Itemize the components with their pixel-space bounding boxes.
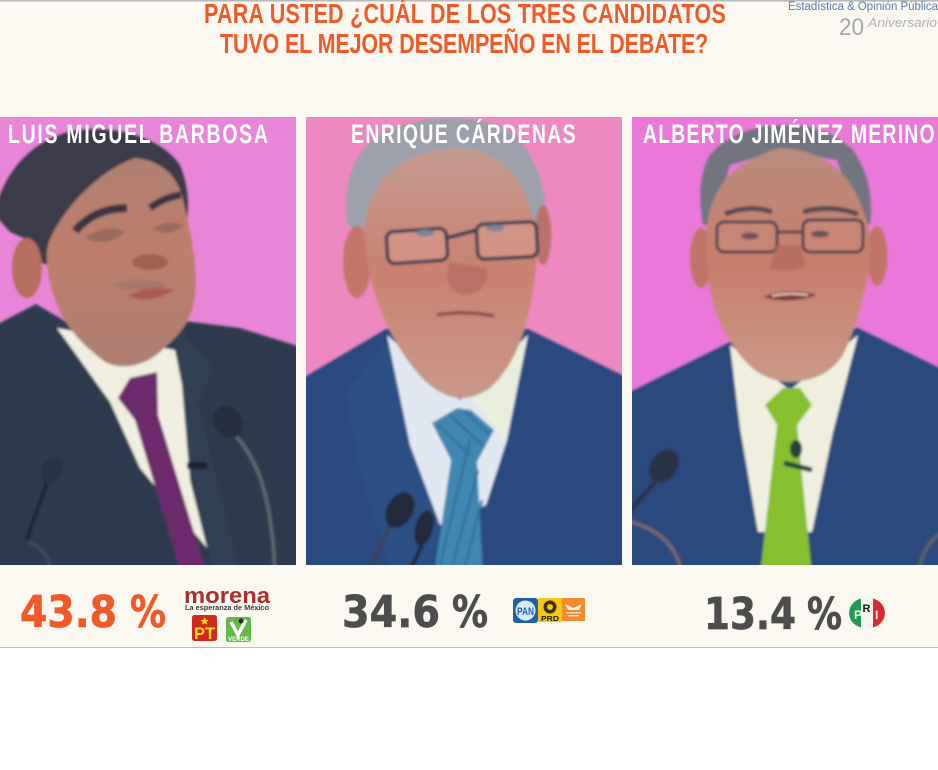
microphones [648,448,680,484]
logo: PRI [849,598,885,628]
result: Jiménez Merino 13.4%: % [807,589,842,640]
panel: Enrique Cárdenas photo [296,117,632,580]
result: Cárdenas 34.6%: % [452,587,488,638]
eyes [416,230,434,236]
microphones [232,432,275,575]
logo: PRI: P [854,608,862,622]
panel: Alberto Jiménez Merino photo [622,117,938,580]
logo: PT: PT [194,624,216,643]
logo: Verde: VERDE [228,636,250,643]
logo: morena: morena [184,583,271,608]
title: PARA USTED ¿CUÁL DE LOS TRES CANDIDATOS [204,0,726,30]
panel: Luis Miguel Barbosa photo [0,117,310,580]
result: Barbosa 43.8%: 43.8 [20,587,117,638]
name: Jiménez Merino: ALBERTO JIMÉNEZ MERINO [643,118,935,149]
nose and mouth [132,254,168,270]
title [204,0,726,60]
glasses [717,222,777,252]
suit [622,328,938,580]
logos: morena, PT, Verde [184,583,271,643]
logo: PRI: I [875,608,878,622]
eyes [85,228,125,242]
shirt [387,335,528,525]
hair [344,117,546,231]
face [47,158,196,366]
lapel microphone [784,463,812,470]
hair [0,129,188,270]
logos: PAN, PRD, MC [513,598,585,623]
logos: morena, PT, Verde: La esperanza de México [185,605,269,612]
tie [760,388,812,575]
logo: PRD: PRD [541,614,560,623]
result: Jiménez Merino 13.4%: 13.4 [704,589,796,640]
ears [343,226,371,298]
logo: PRI: R [862,603,870,615]
shirt [730,335,858,532]
name: Cárdenas: ENRIQUE CÁRDENAS [351,118,576,149]
tie [118,372,207,575]
hair [700,125,871,225]
logo: Estadística & Opinión Pública 20 Aniversario [788,1,938,41]
result: Barbosa 43.8%: % [130,587,166,638]
glasses [386,228,448,264]
eyebrows [725,208,858,214]
tie [432,408,494,575]
suit [0,304,310,580]
eyebrows [75,208,127,231]
nose and mouth [770,245,806,271]
ears [690,228,712,288]
microphones [368,524,392,565]
ear [12,238,42,298]
eyes [741,232,759,240]
face [706,148,870,382]
suit [306,327,622,565]
face [364,148,537,398]
logo: Movimiento Ciudadano [562,598,585,621]
logo: Estadística & Opinión Pública 20 Aniversario: Estadística & Opinión Pública [788,1,938,13]
name: Barbosa: LUIS MIGUEL BARBOSA [8,119,268,149]
logo: Estadística & Opinión Pública 20 Aniversario: 20 [839,14,864,41]
logo: PAN: PAN [517,606,534,618]
logo: Estadística & Opinión Pública 20 Aniversario: Aniversario [867,16,937,30]
title: TUVO EL MEJOR DESEMPEÑO EN EL DEBATE? [220,28,708,60]
nose and mouth [447,262,487,295]
result: Cárdenas 34.6%: 34.6 [342,587,440,638]
shirt [57,328,207,548]
